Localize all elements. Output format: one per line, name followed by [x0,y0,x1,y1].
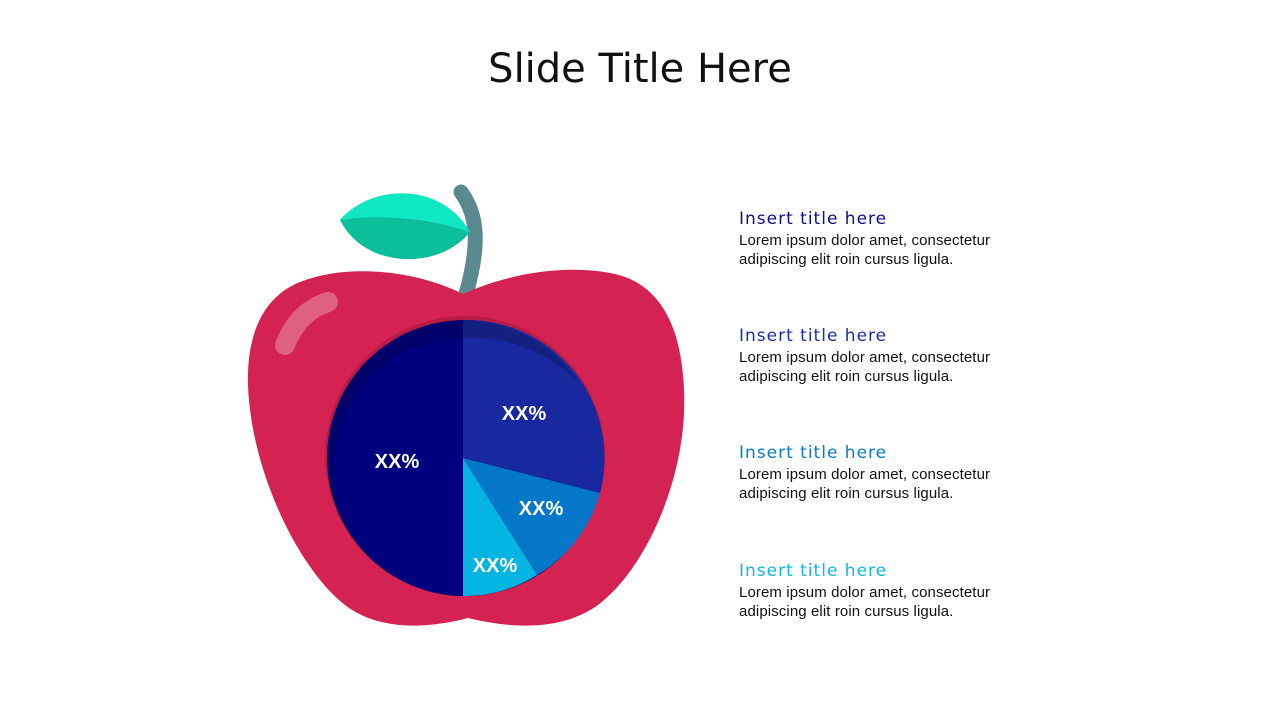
text block 2: adipiscing elit roin cursus ligula. [739,368,953,385]
title: Slide Title Here [488,46,792,92]
pie chart: XX% [502,403,546,425]
apple body [248,270,684,626]
pie chart: XX% [375,451,419,473]
text block 1: adipiscing elit roin cursus ligula. [739,251,953,268]
icon: leaf [340,193,470,259]
text block 2 [739,326,990,385]
text block 4: adipiscing elit roin cursus ligula. [739,603,953,620]
text block 2: Insert title here [739,326,887,346]
text block 1: Lorem ipsum dolor amet, consectetur [739,232,990,249]
text block 3: Insert title here [739,443,887,463]
icon: stem [461,192,475,294]
pie chart [325,316,605,596]
text block 2: Lorem ipsum dolor amet, consectetur [739,349,990,366]
pie chart: XX% [519,498,563,520]
text block 4: Lorem ipsum dolor amet, consectetur [739,584,990,601]
text block 1 [739,209,990,268]
text block 3 [739,443,990,502]
pie chart: XX% [473,555,517,577]
text block 3: Lorem ipsum dolor amet, consectetur [739,466,990,483]
text block 3: adipiscing elit roin cursus ligula. [739,485,953,502]
text block 4 [739,561,990,620]
text block 4: Insert title here [739,561,887,581]
text block 1: Insert title here [739,209,887,229]
